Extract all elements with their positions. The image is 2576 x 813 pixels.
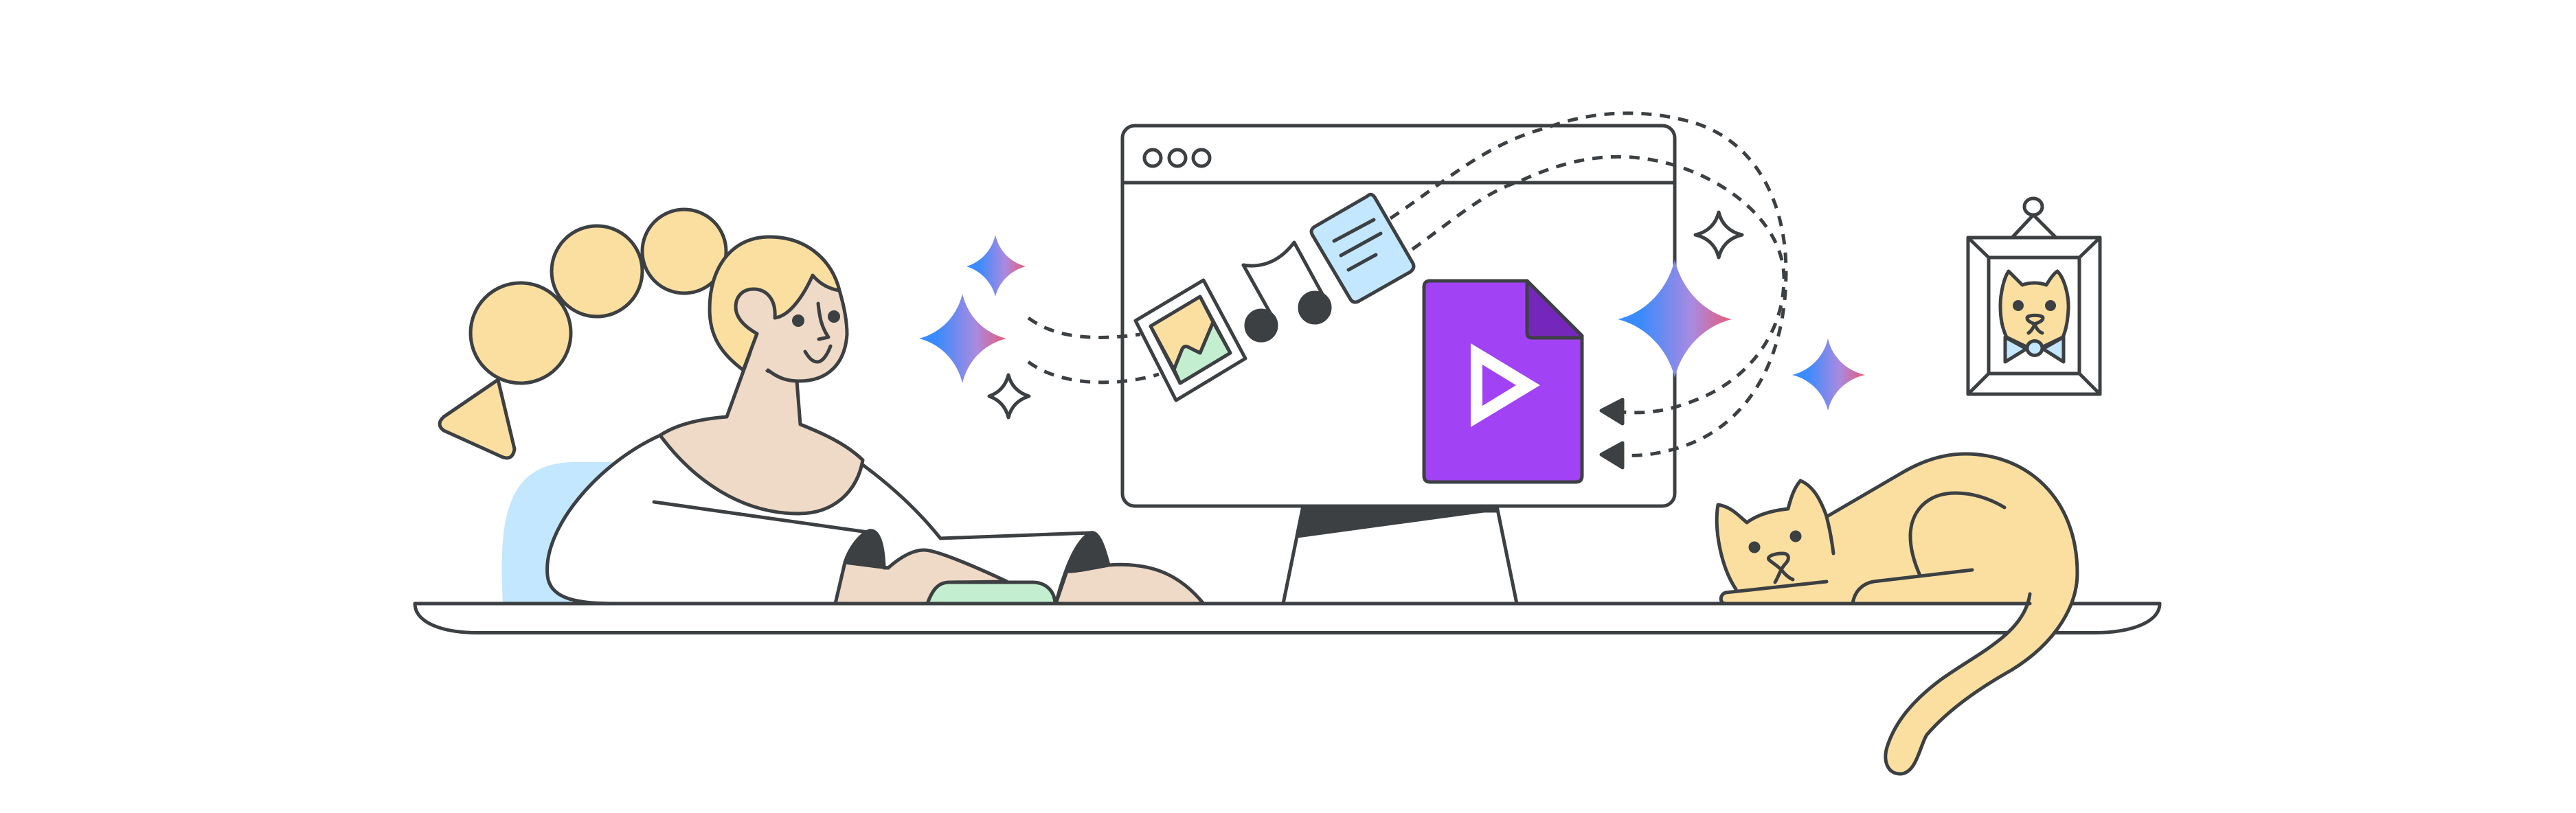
dashed path: lower arc to upper arrow bbox=[1412, 157, 1784, 413]
cat back leg bbox=[1853, 570, 1972, 604]
right sleeve edge bbox=[1056, 533, 1090, 604]
cat eyes bbox=[1750, 543, 1759, 551]
portrait cat head bbox=[2000, 271, 2068, 347]
sparkle: small right bbox=[1792, 339, 1865, 411]
neck and chest skin bbox=[660, 334, 863, 514]
cat bbox=[1717, 454, 2077, 774]
sparkle: large left bbox=[919, 294, 1006, 383]
right forearm bbox=[1056, 564, 1204, 604]
dashed path: top arc to lower arrow bbox=[1390, 113, 1786, 455]
portrait nose bbox=[2027, 315, 2043, 333]
sparkle: outline right bbox=[1695, 212, 1742, 257]
framed cat picture bbox=[1968, 198, 2100, 394]
monitor stand bbox=[1283, 506, 1517, 604]
right cuff bbox=[1067, 533, 1109, 571]
sparkle: outline left bbox=[989, 375, 1029, 417]
mouth bbox=[805, 346, 831, 362]
arrowhead lower bbox=[1601, 443, 1623, 468]
arrowhead upper bbox=[1601, 400, 1623, 424]
person bbox=[440, 209, 1204, 604]
green tablet bbox=[927, 582, 1055, 604]
chair back bbox=[502, 462, 622, 604]
face bbox=[736, 275, 847, 381]
nose bbox=[818, 304, 828, 339]
document icon bbox=[1311, 194, 1414, 302]
browser window bbox=[1122, 126, 1675, 506]
shirt bbox=[547, 417, 1090, 604]
sparkle: small top left bbox=[967, 235, 1026, 297]
bow tie bbox=[2005, 337, 2064, 362]
purple video file bbox=[1424, 281, 1582, 482]
hair bbox=[710, 237, 839, 370]
portrait eyes bbox=[2014, 302, 2054, 309]
cat head bbox=[1717, 481, 1833, 589]
bow knot bbox=[2027, 341, 2042, 356]
left forearm bbox=[835, 550, 1007, 604]
table bbox=[415, 604, 2160, 633]
cat body and tail bbox=[1717, 454, 2077, 774]
hair buns bbox=[440, 209, 726, 458]
left cuff bbox=[845, 531, 888, 568]
eyes bbox=[794, 316, 802, 325]
music note icon bbox=[1243, 242, 1330, 341]
dashed path: input from left lower bbox=[1028, 362, 1159, 382]
window control buttons bbox=[1144, 150, 1210, 166]
cat haunch bbox=[1910, 493, 2004, 575]
image card icon bbox=[1136, 280, 1245, 400]
table top edge bbox=[415, 602, 2160, 606]
hook bbox=[2012, 198, 2056, 238]
cat nose and mouth bbox=[1769, 553, 1793, 582]
frame bbox=[1968, 238, 2100, 394]
dashed path: input from left upper bbox=[1028, 318, 1140, 337]
sparkle: large right bbox=[1618, 260, 1732, 378]
cat front paw bbox=[1721, 582, 1827, 604]
sleeve crease bbox=[654, 502, 868, 532]
